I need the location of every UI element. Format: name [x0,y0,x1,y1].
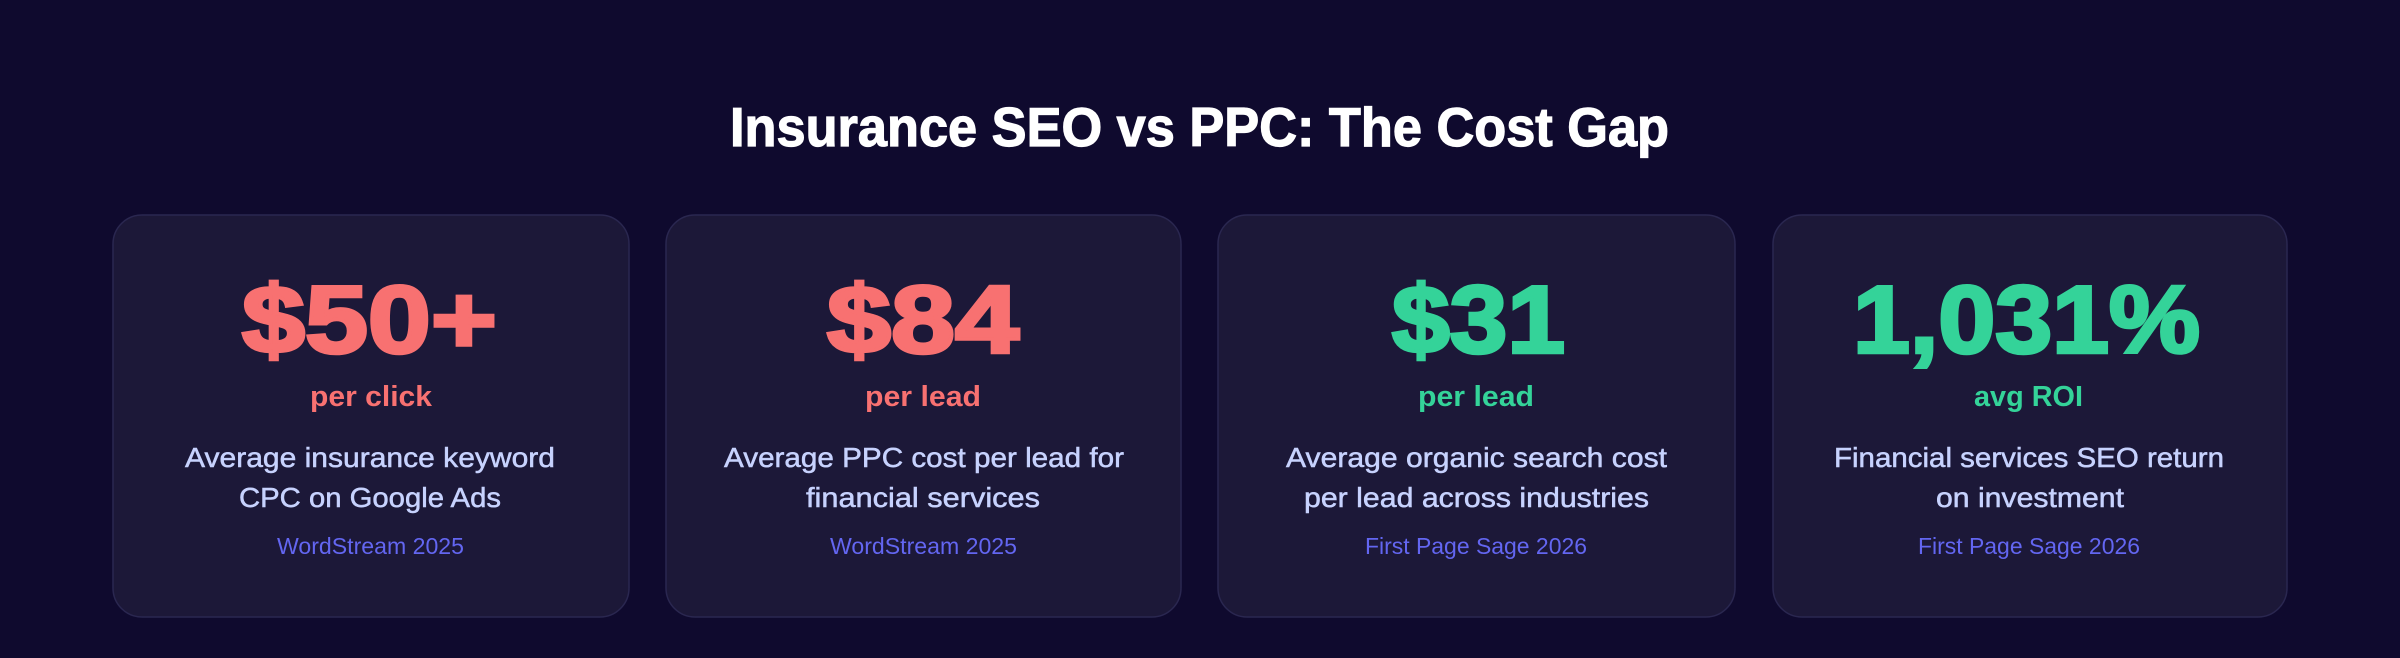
card background [1218,215,1735,617]
description: Average insurance keyword [185,442,555,473]
source: First Page Sage 2026 [1365,533,1587,559]
unit label: per click [310,381,433,413]
panel: average ROI [1773,215,2287,617]
description: per lead across industries [1304,482,1649,513]
unit label: per lead [1418,381,1534,413]
source: First Page Sage 2026 [1918,533,2140,559]
panel: PPC per lead [666,215,1181,617]
unit label: per lead [865,381,981,413]
description: Average organic search cost [1286,442,1667,473]
description: financial services [806,482,1040,513]
unit label: avg ROI [1974,381,2083,413]
description [724,442,1124,513]
big number: 1,031% [1853,266,2200,374]
source: WordStream 2025 [830,533,1017,559]
description: Financial services SEO return [1834,442,2224,473]
description: on investment [1936,482,2124,513]
card background [113,215,629,617]
description [185,442,555,513]
big number: $84 [827,266,1019,374]
big number: $50+ [242,266,497,374]
title: Insurance SEO vs PPC: The Cost Gap [730,96,1669,158]
description: CPC on Google Ads [239,482,501,513]
source: WordStream 2025 [277,533,464,559]
card background [1773,215,2287,617]
panel: organic per lead [1218,215,1735,617]
description: Average PPC cost per lead for [724,442,1124,473]
card background [666,215,1181,617]
panel: per click [113,215,629,617]
big number: $31 [1392,266,1565,374]
description [1834,442,2224,513]
description [1286,442,1667,513]
